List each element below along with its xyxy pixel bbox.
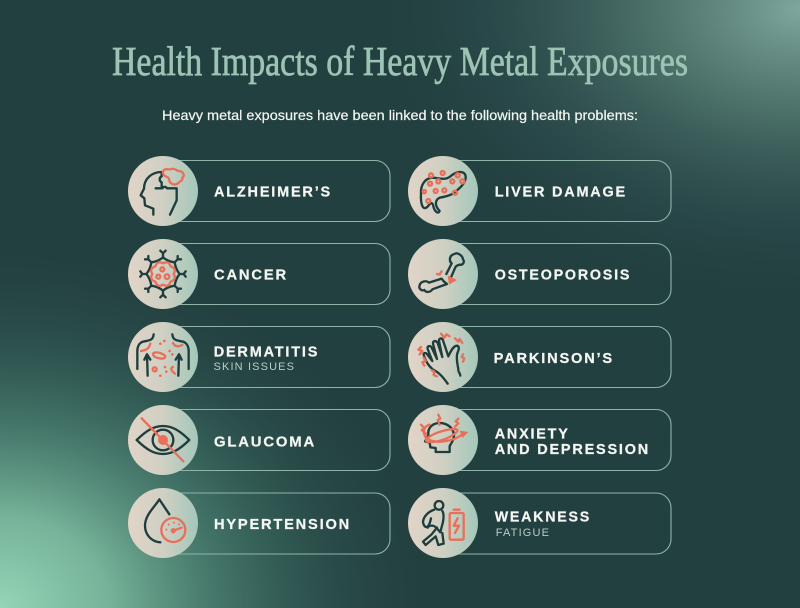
label: CANCER <box>214 267 288 283</box>
icon: blood drop and gauge <box>145 499 185 542</box>
icon: eye with slash <box>137 418 189 461</box>
sublabel: FATIGUE <box>496 527 549 539</box>
panel: Dermatitis <box>128 322 390 392</box>
panel: Anxiety and depression <box>408 405 671 475</box>
icon: torso with skin rash <box>137 334 189 377</box>
icon: tired person with low battery <box>423 501 464 545</box>
panel: Cancer <box>128 239 390 309</box>
icon: cancer cell <box>140 251 186 297</box>
panel: Alzheimer's <box>128 156 390 226</box>
sublabel: SKIN ISSUES <box>214 361 294 373</box>
label: LIVER DAMAGE <box>495 185 627 201</box>
label: ALZHEIMER’S <box>214 185 332 201</box>
panel: Hypertension <box>128 488 390 558</box>
label: line one: ANXIETY <box>495 426 570 442</box>
icon: trembling hand <box>418 334 464 384</box>
label: GLAUCOMA <box>214 435 316 451</box>
title: Health Impacts of Heavy Metal Exposures <box>112 38 688 84</box>
panel: Weakness <box>408 488 671 558</box>
label: HYPERTENSION <box>214 517 351 533</box>
subtitle: Heavy metal exposures have been linked to the following health problems: <box>162 107 638 123</box>
icon: liver with lesions <box>421 171 466 213</box>
label: WEAKNESS <box>495 510 591 526</box>
label: OSTEOPOROSIS <box>495 267 631 283</box>
panel: Glaucoma <box>128 405 390 475</box>
panel: Osteoporosis <box>408 239 671 309</box>
icon: head with puzzle brain <box>141 169 184 215</box>
label: DERMATITIS <box>214 345 319 361</box>
icon: broken bone <box>419 253 464 292</box>
panel: Parkinson's <box>408 322 671 392</box>
panel: Liver damage <box>408 156 671 226</box>
label: PARKINSON’S <box>494 351 614 367</box>
label: line two: AND DEPRESSION <box>495 442 650 458</box>
icon: head with swirling lines <box>421 415 468 452</box>
